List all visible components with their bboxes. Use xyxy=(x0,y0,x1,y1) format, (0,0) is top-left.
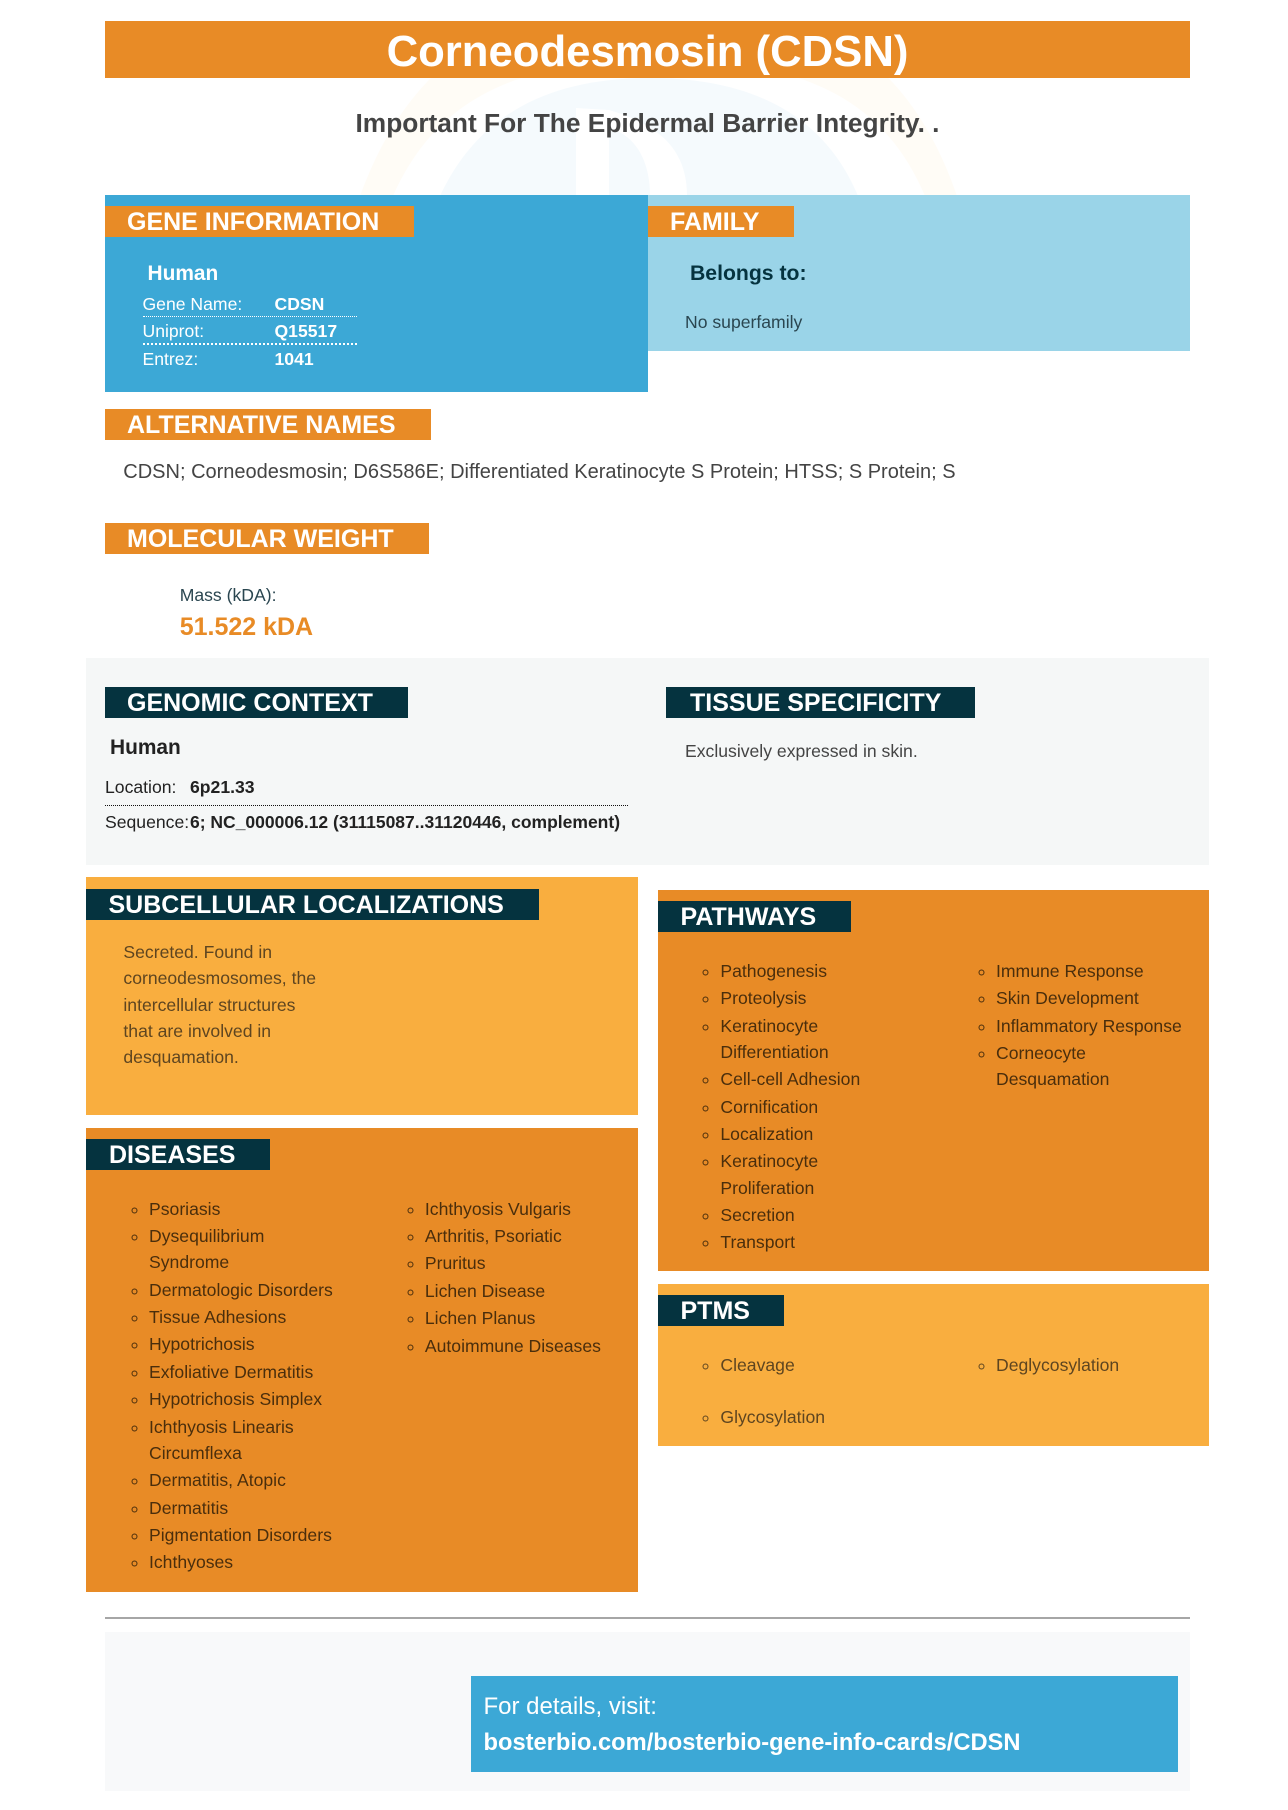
localization text: that are involved in xyxy=(123,1021,271,1041)
disease list column 2: Lichen Planus xyxy=(425,1308,535,1328)
callout label: For details, visit: xyxy=(484,1693,657,1720)
entrez row: 1041 xyxy=(274,349,314,369)
pathway list column 2 xyxy=(978,961,1182,1089)
disease list column 1: Dermatologic Disorders xyxy=(149,1280,333,1300)
disease list column 1: Hypotrichosis xyxy=(149,1334,255,1354)
disease list column 1: Ichthyoses xyxy=(149,1552,233,1572)
panel: subcellular localizations xyxy=(86,877,638,1115)
heading: alternative names: ALTERNATIVE NAMES xyxy=(127,411,396,439)
pathway list column 1: Pathogenesis xyxy=(720,961,827,981)
pathway list column 2: Immune Response xyxy=(996,961,1144,981)
species label: Human xyxy=(110,736,181,759)
species label: Human xyxy=(148,262,218,284)
pathway list column 1: Localization xyxy=(720,1124,813,1144)
location row xyxy=(105,770,628,806)
localization text: Secreted. Found in xyxy=(123,942,272,962)
disease list column 2: Arthritis, Psoriatic xyxy=(425,1226,562,1246)
panel: pathways xyxy=(658,890,1209,1271)
pathway list column 1: Keratinocyte xyxy=(720,1151,818,1171)
heading: pathways: PATHWAYS xyxy=(680,903,816,931)
disease list column 1: Hypotrichosis Simplex xyxy=(149,1389,322,1409)
pathway list column 2: Corneocyte xyxy=(996,1043,1086,1063)
disease list column 1: Exfoliative Dermatitis xyxy=(149,1362,313,1382)
heading: family xyxy=(648,206,794,237)
pathway list column 2: Skin Development xyxy=(996,988,1139,1008)
sequence row: Sequence: xyxy=(105,812,189,832)
pathway list column 1: Proteolysis xyxy=(720,988,806,1008)
pathway list column 1: Keratinocyte xyxy=(720,1016,818,1036)
alternative names text: CDSN; Corneodesmosin; D6S586E; Differentiated Keratinocyte S Protein; HTSS; S Protein; S xyxy=(123,461,956,483)
disease list column 2: Pruritus xyxy=(425,1253,486,1273)
gene name row xyxy=(142,289,356,317)
panel: genomic context and tissue specificity xyxy=(86,658,1209,865)
location row: Location: xyxy=(105,777,176,797)
panel: diseases xyxy=(86,1128,638,1592)
disease list column 1: Ichthyosis Linearis xyxy=(149,1417,294,1437)
tissue specificity text: Exclusively expressed in skin. xyxy=(685,741,918,761)
pathway list column 2: Inflammatory Response xyxy=(996,1016,1182,1036)
uniprot row xyxy=(142,317,356,345)
title: Corneodesmosin (CDSN) xyxy=(387,27,908,76)
disease list column 1: Tissue Adhesions xyxy=(149,1307,286,1327)
pathway list column 1: Proliferation xyxy=(720,1178,814,1198)
disease list column 1: Dermatitis, Atopic xyxy=(149,1470,286,1490)
heading: subcellular localizations: SUBCELLULAR LOCALIZATIONS xyxy=(108,891,504,919)
disease list column 1 xyxy=(132,1199,333,1572)
pathway list column 1: Transport xyxy=(720,1232,795,1252)
uniprot row: Uniprot: xyxy=(142,321,204,341)
heading: PTMs xyxy=(658,1295,784,1326)
PTM list column 1 xyxy=(702,1355,825,1427)
heading: genomic context: GENOMIC CONTEXT xyxy=(127,689,373,717)
gene name row: Gene Name: xyxy=(142,294,242,314)
localization text: desquamation. xyxy=(123,1047,239,1067)
panel: footer xyxy=(105,1632,1190,1791)
callout url: bosterbio.com/bosterbio-gene-info-cards/CDSN xyxy=(484,1730,1020,1756)
panel: family xyxy=(648,195,1190,351)
disease list column 1: Dysequilibrium xyxy=(149,1226,264,1246)
gene name row: CDSN xyxy=(274,294,324,314)
entrez row: Entrez: xyxy=(142,349,198,369)
PTM list column 1: Glycosylation xyxy=(720,1407,825,1427)
pathway list column 1: Cornification xyxy=(720,1097,818,1117)
PTM list column 2: Deglycosylation xyxy=(996,1355,1119,1375)
mass label: Mass (kDA): xyxy=(180,585,276,605)
localization text: corneodesmosomes, the xyxy=(123,968,316,988)
sequence row: 6; NC_000006.12 (31115087..31120446, complement) xyxy=(190,812,620,832)
heading: diseases: DISEASES xyxy=(109,1141,235,1169)
location row: 6p21.33 xyxy=(190,777,255,797)
disease list column 2: Lichen Disease xyxy=(425,1281,545,1301)
disease list column 1: Syndrome xyxy=(149,1252,229,1272)
heading: tissue specificity: TISSUE SPECIFICITY xyxy=(690,689,941,717)
entrez row xyxy=(142,349,314,369)
disease list column 1: Pigmentation Disorders xyxy=(149,1525,332,1545)
uniprot row: Q15517 xyxy=(274,321,337,341)
disease list column 1: Psoriasis xyxy=(149,1199,220,1219)
heading: family: FAMILY xyxy=(670,208,759,236)
disease list column 1: Dermatitis xyxy=(149,1498,228,1518)
heading: diseases xyxy=(86,1139,270,1170)
pathway list column 2: Desquamation xyxy=(996,1069,1109,1089)
family value: No superfamily xyxy=(685,312,802,332)
panel: PTMs xyxy=(658,1284,1209,1446)
disease list column 2: Autoimmune Diseases xyxy=(425,1336,601,1356)
title xyxy=(105,21,1190,78)
watermark logo xyxy=(360,78,956,195)
callout: details link xyxy=(471,1676,1178,1772)
subtitle: Important For The Epidermal Barrier Integrity. . xyxy=(356,108,940,138)
localization text xyxy=(123,942,316,1067)
pathway list column 1: Secretion xyxy=(720,1205,795,1225)
PTM list column 1: Cleavage xyxy=(720,1355,795,1375)
localization text: intercellular structures xyxy=(123,995,295,1015)
heading: PTMs: PTMS xyxy=(680,1297,750,1325)
belongs to label: Belongs to: xyxy=(690,262,807,284)
disease list column 2: Ichthyosis Vulgaris xyxy=(425,1199,571,1219)
pathway list column 1: Differentiation xyxy=(720,1042,829,1062)
pathway list column 1: Cell-cell Adhesion xyxy=(720,1069,860,1089)
pathway list column 1 xyxy=(702,961,860,1252)
panel: gene information xyxy=(105,195,648,392)
disease list column 2 xyxy=(408,1199,601,1356)
heading: pathways xyxy=(658,901,851,932)
mass value: 51.522 kDA xyxy=(180,613,313,641)
disease list column 1: Circumflexa xyxy=(149,1443,242,1463)
heading: gene information: GENE INFORMATION xyxy=(127,208,379,236)
heading: molecular weight: MOLECULAR WEIGHT xyxy=(127,525,394,553)
